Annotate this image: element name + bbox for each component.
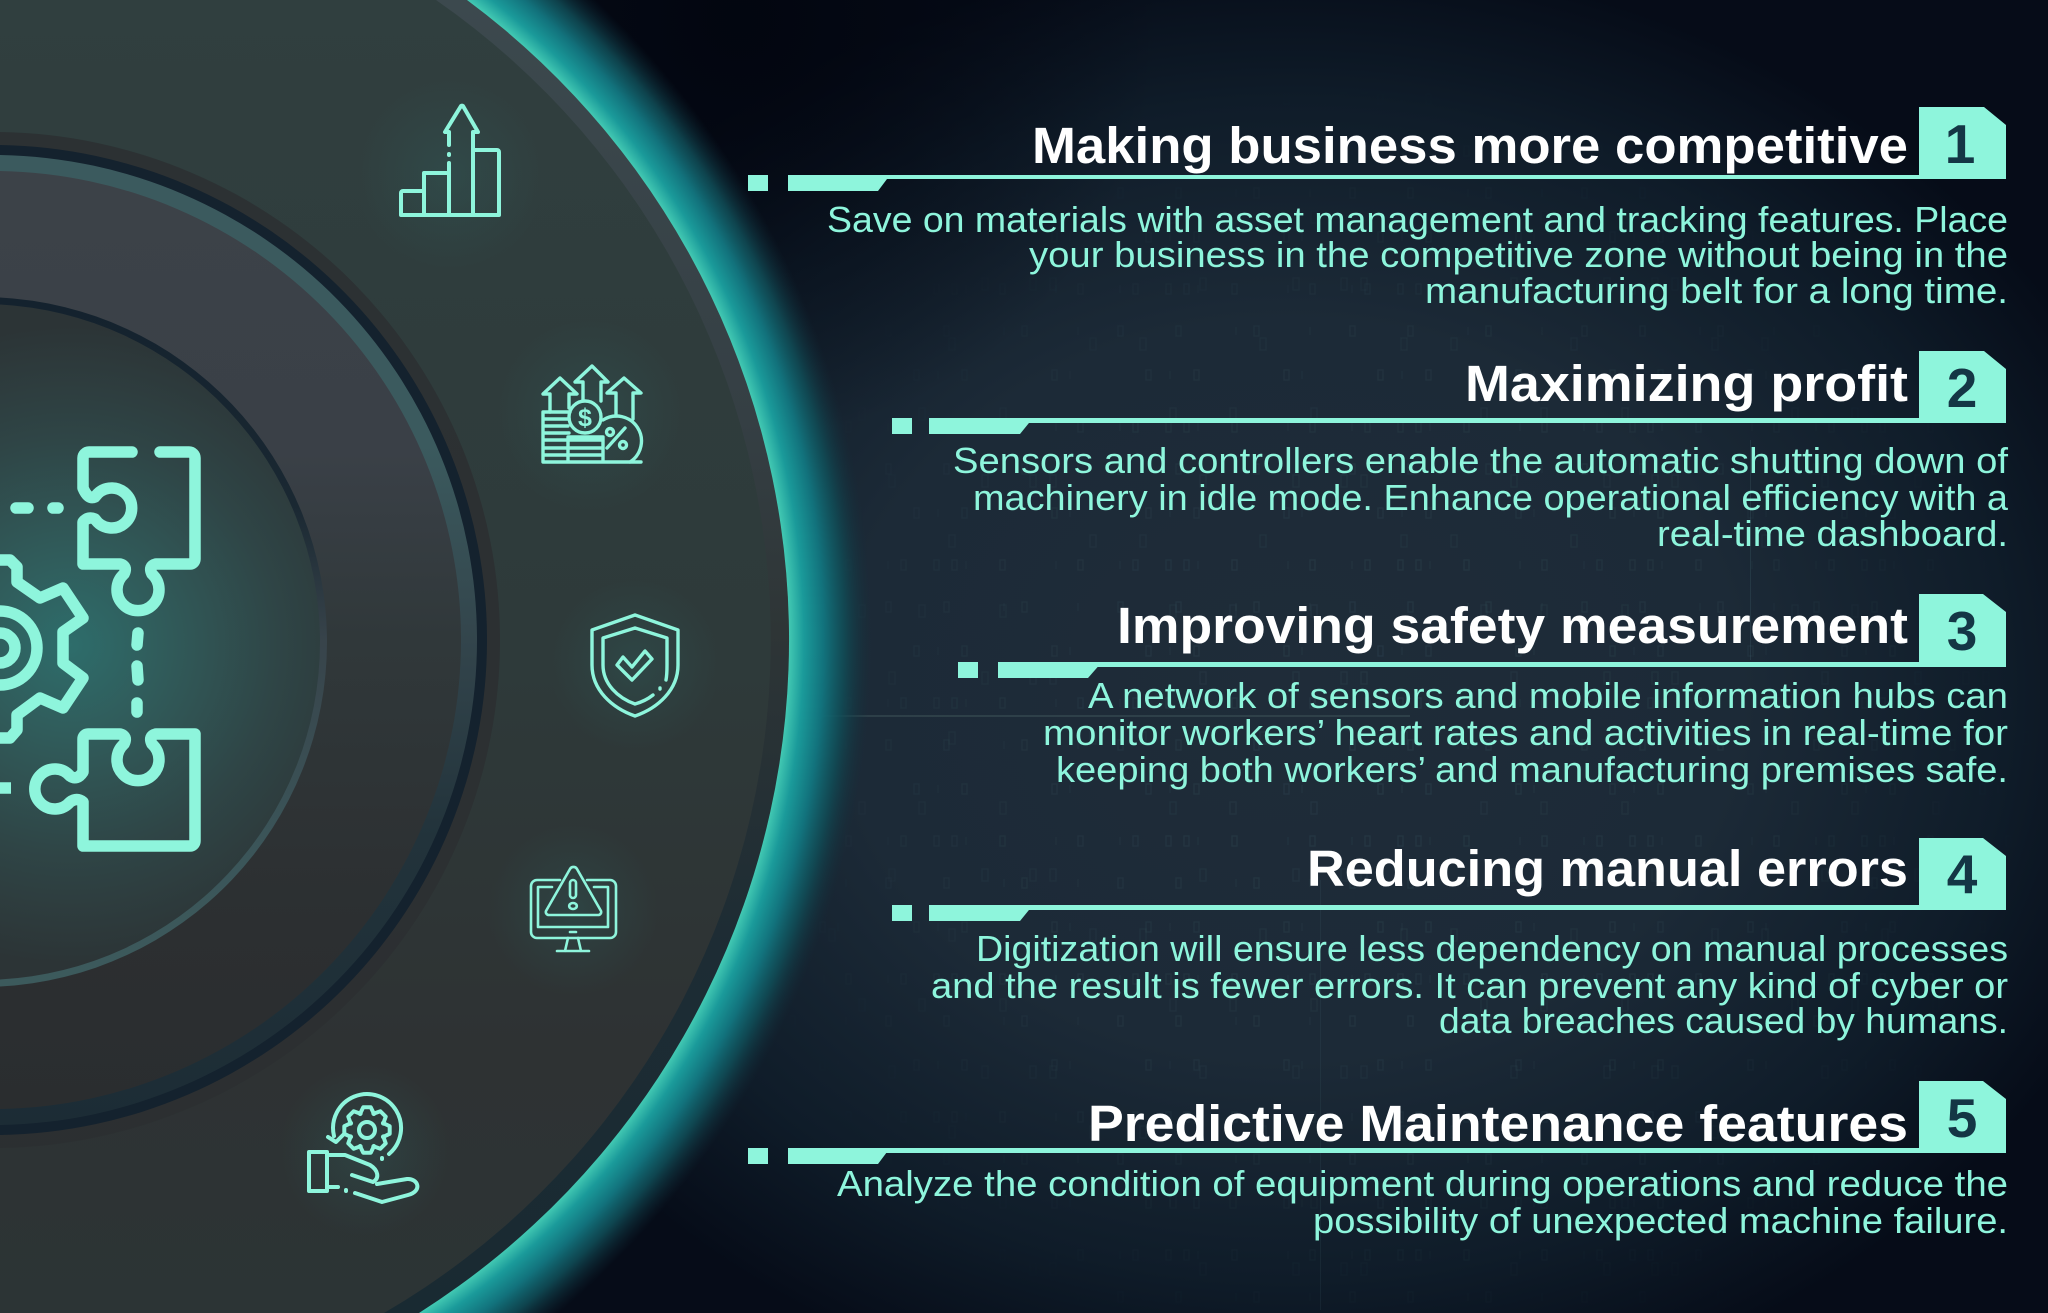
- heading 4: Reducing manual errors: [1307, 840, 1908, 897]
- icon: puzzle and gear: [0, 452, 195, 846]
- section 3: improving safety measurement: [958, 594, 2008, 790]
- heading 2: Maximizing profit: [1465, 355, 1908, 412]
- section 2: maximizing profit: [892, 351, 2009, 554]
- icon: hand with gear: [309, 1094, 417, 1202]
- number badge 3: 3: [1947, 600, 1977, 662]
- icon: monitor alert: [531, 867, 616, 951]
- number badge 3: [958, 594, 2006, 678]
- middle ring: [0, 132, 500, 1148]
- body text 2: Sensors and controllers enable the automatic shutting down of: [953, 440, 2009, 481]
- body text 2: [953, 440, 2009, 554]
- icon glows: [355, 80, 545, 270]
- body text 2: machinery in idle mode. Enhance operational efficiency with a: [973, 477, 2009, 518]
- dollar glyph: $: [578, 404, 592, 432]
- body text 4: and the result is fewer errors. It can prevent any kind of cyber or: [931, 965, 2008, 1006]
- heading 3: Improving safety measurement: [1117, 597, 1908, 654]
- panel: concentric disc: [0, 0, 789, 1313]
- background: [555, 0, 2048, 1313]
- body text 4: data breaches caused by humans.: [1439, 1000, 2008, 1041]
- number badge 2: [892, 351, 2006, 434]
- number badge 4: 4: [1947, 843, 1978, 905]
- body text 4: [931, 928, 2008, 1041]
- section 4: reducing manual errors: [892, 838, 2008, 1041]
- body text 5: [837, 1163, 2008, 1241]
- body text 3: A network of sensors and mobile information hubs can: [1088, 675, 2008, 716]
- section 5: predictive maintenance features: [748, 1081, 2008, 1241]
- number badge 5: 5: [1947, 1087, 1977, 1149]
- body text 1: your business in the competitive zone without being in the: [1029, 234, 2008, 275]
- body text 5: possibility of unexpected machine failure.: [1313, 1200, 2008, 1241]
- body text 1: [827, 199, 2008, 311]
- body text 5: Analyze the condition of equipment during operations and reduce the: [837, 1163, 2008, 1204]
- body text 4: Digitization will ensure less dependency on manual processes: [976, 928, 2008, 969]
- number badge 4: [892, 838, 2006, 921]
- body text 3: monitor workers’ heart rates and activities in real-time for: [1043, 712, 2008, 753]
- icon: rising bar chart: [401, 106, 499, 215]
- icon: profit coins and arrows: [543, 366, 641, 462]
- section 1: making business more competitive: [748, 107, 2008, 311]
- number badge 2: 2: [1947, 357, 1977, 419]
- number badge 1: [748, 107, 2006, 191]
- icon: safety shield: [592, 615, 678, 716]
- body text 2: real-time dashboard.: [1657, 513, 2008, 554]
- number badge 5: [748, 1081, 2006, 1164]
- body text 1: manufacturing belt for a long time.: [1425, 270, 2008, 311]
- body text 1: Save on materials with asset management and tracking features. Place: [827, 199, 2008, 240]
- outer disc: [0, 0, 789, 1313]
- heading 1: Making business more competitive: [1032, 117, 1908, 174]
- body text 3: [1043, 675, 2008, 790]
- heading 5: Predictive Maintenance features: [1088, 1095, 1908, 1152]
- body text 3: keeping both workers’ and manufacturing premises safe.: [1056, 749, 2008, 790]
- inner core: [0, 298, 327, 986]
- number badge 1: 1: [1945, 113, 1975, 175]
